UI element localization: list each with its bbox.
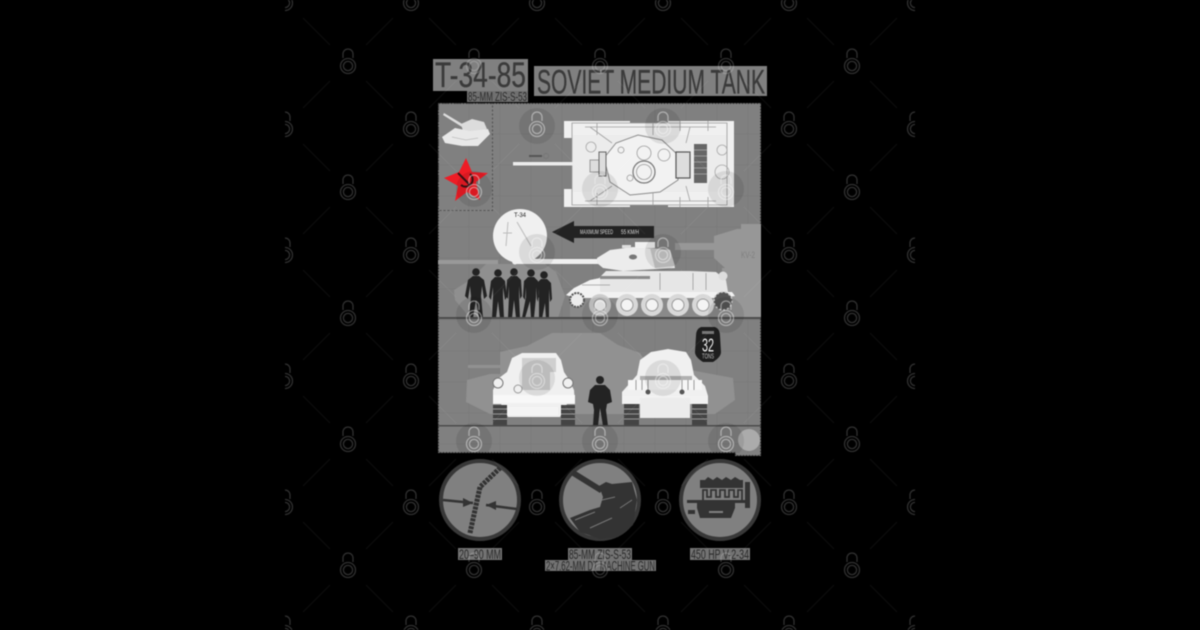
icon: weight 32 tons: 32: [702, 336, 714, 356]
panel: blueprint: [438, 103, 761, 456]
ghost tank: KV-2 side: KV-2: [741, 250, 755, 260]
ground line: lower: [438, 425, 761, 426]
label: engine: 450 HP V-2-34: [691, 547, 749, 562]
infographic artwork: [285, 0, 915, 630]
label: armor thickness: 20–90 MM: [459, 547, 501, 562]
watermark pattern: [285, 0, 915, 630]
detail circle: T-34: T-34: [514, 212, 526, 219]
tank front view: front: [622, 349, 708, 426]
turret: [604, 135, 678, 195]
ground line: upper: [438, 317, 761, 319]
arrow: maximum speed: MAXIMUM SPEED: [580, 230, 613, 236]
barrel: [513, 162, 573, 166]
ghost tank: left side view: [438, 260, 565, 318]
icon: armor: [441, 461, 519, 539]
label: armament: 2×7.62-MM DT MACHINE GUN: [546, 558, 655, 574]
title: T-34-85: T-34-85: [435, 56, 526, 95]
heading: Soviet medium tank: [534, 64, 767, 102]
label: armor thickness: [458, 547, 502, 562]
tank top view: [513, 121, 734, 207]
subtitle: gun designation: [467, 89, 528, 104]
icon: weight 32 tons: TONS: [702, 354, 714, 360]
label: engine: [690, 547, 750, 562]
hammer and sickle: [458, 173, 473, 187]
icon: weight 32 tons: [695, 327, 721, 362]
label: armament: 85-MM ZIS-S-53: [569, 547, 631, 562]
subtitle: gun designation: 85-MM ZIS-S-53: [468, 89, 527, 104]
small label: top view: [529, 154, 548, 158]
icon: red star: [444, 158, 488, 201]
ghost tank: KV-2 side: [675, 224, 761, 318]
stamp: [738, 429, 760, 451]
arrow: maximum speed: [552, 221, 654, 243]
arrow: maximum speed: 55 KM/H: [621, 230, 639, 236]
tank side view: [512, 242, 735, 318]
icon: gun: [561, 461, 639, 539]
detail circle: T-34: [493, 209, 547, 263]
label: armament: [545, 547, 656, 574]
crew silhouettes: [465, 268, 552, 319]
icon: small tank: [442, 113, 490, 146]
ghost tank: front view behind: [466, 333, 735, 414]
icon: engine: [681, 461, 759, 539]
soldier silhouette: [588, 376, 612, 426]
tank front view: rear: [493, 353, 575, 426]
engine deck: [676, 152, 690, 178]
heading: Soviet medium tank: SOVIET MEDIUM TANK: [537, 64, 765, 102]
icon sidebar box: [438, 104, 492, 210]
